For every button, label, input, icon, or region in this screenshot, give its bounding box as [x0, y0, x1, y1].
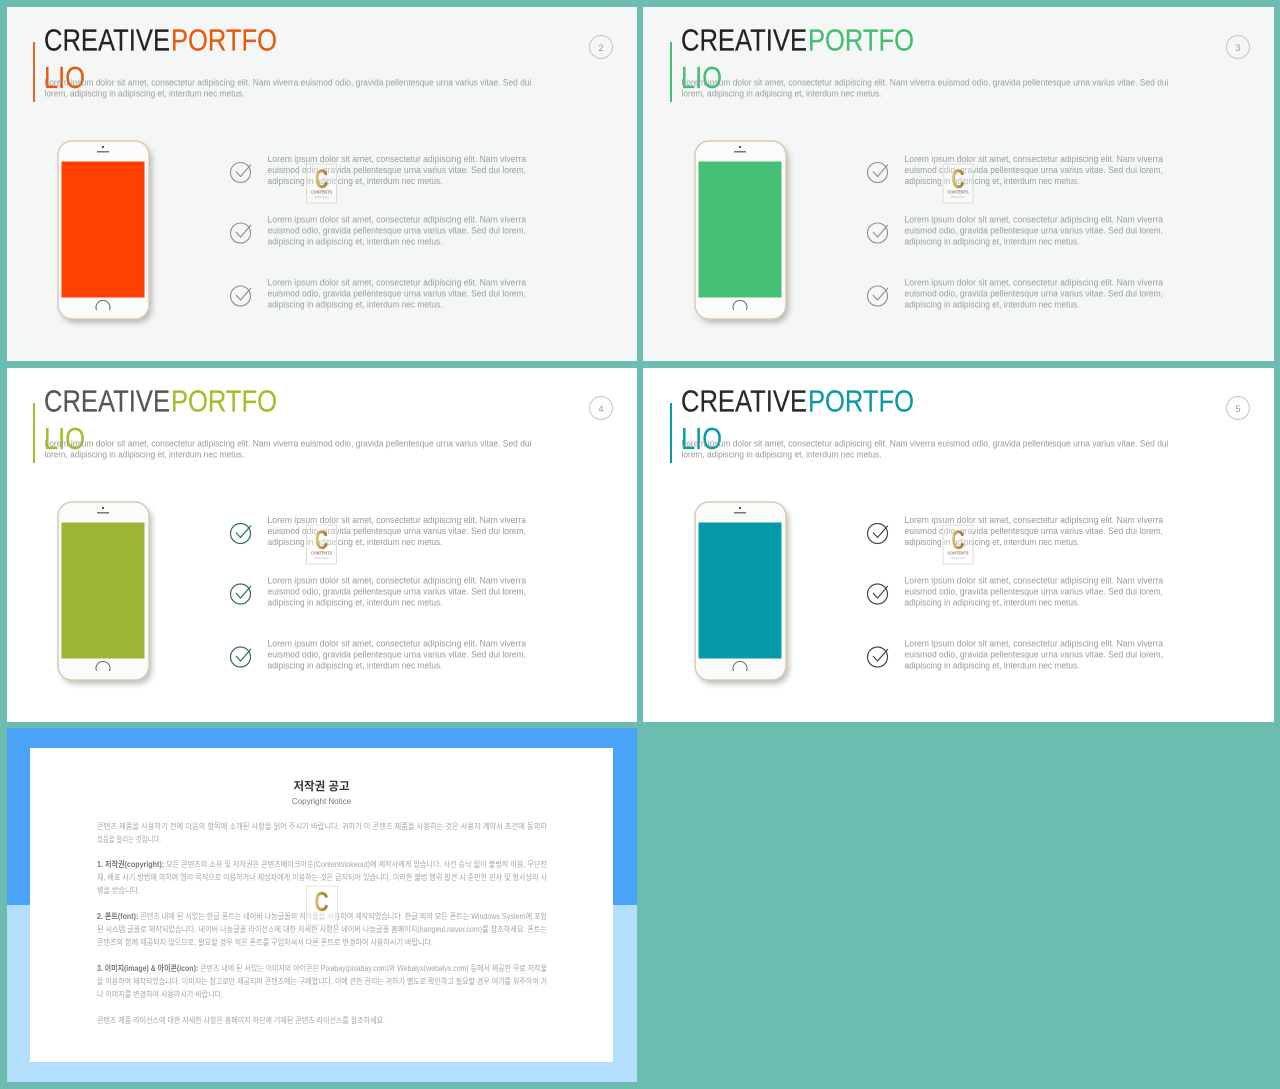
panel: lime slide [7, 368, 637, 722]
list item 2 [230, 214, 526, 246]
list item 1: Lorem ipsum dolor sit amet, consectetur adipiscing elit. Nam viverra [268, 515, 526, 525]
watermark logo: MAKE COPY [314, 557, 329, 560]
page number: 2 [598, 43, 604, 53]
intro text [44, 438, 532, 460]
list item 3: Lorem ipsum dolor sit amet, consectetur adipiscing elit. Nam viverra [904, 278, 1163, 288]
list item 2: euismod odio, gravida pellentesque urna varius vitae. Sed dui lorem, [904, 226, 1163, 236]
list item 3: euismod odio, gravida pellentesque urna varius vitae. Sed dui lorem, [268, 650, 526, 660]
list item 2: Lorem ipsum dolor sit amet, consectetur adipiscing elit. Nam viverra [268, 214, 526, 224]
title: CREATIVE [681, 22, 807, 58]
watermark logo: C [314, 886, 328, 917]
list item 3: adipiscing in adipiscing et, interdum nec metus. [904, 300, 1080, 310]
title: CREATIVE [681, 384, 807, 418]
list item 1 [868, 154, 1163, 186]
list item 3: adipiscing in adipiscing et, interdum nec metus. [904, 660, 1080, 670]
list item 3: euismod odio, gravida pellentesque urna varius vitae. Sed dui lorem, [268, 288, 526, 298]
page number [1226, 396, 1250, 420]
list item 2: euismod odio, gravida pellentesque urna varius vitae. Sed dui lorem, [904, 586, 1163, 596]
list item 1: Lorem ipsum dolor sit amet, consectetur adipiscing elit. Nam viverra [904, 515, 1163, 525]
section 2: font [97, 911, 548, 947]
intro text [682, 78, 1168, 98]
watermark logo: C [952, 164, 964, 194]
intro text: lorem, adipiscing in adipiscing et, interdum nec metus. [44, 450, 244, 460]
list item 3: euismod odio, gravida pellentesque urna varius vitae. Sed dui lorem, [904, 650, 1163, 660]
watermark logo: MAKE COPY [951, 557, 966, 560]
title [681, 22, 914, 95]
intro text: lorem, adipiscing in adipiscing et, interdum nec metus. [682, 88, 882, 98]
list item 1: euismod odio, gravida pellentesque urna varius vitae. Sed dui lorem, [904, 526, 1163, 536]
notice intro: 셨음을 알리는 것입니다. [97, 834, 161, 844]
panel: copyright notice [7, 728, 637, 1082]
list item 1: Lorem ipsum dolor sit amet, consectetur adipiscing elit. Nam viverra [904, 154, 1163, 164]
page number [1226, 36, 1250, 58]
list item 2: adipiscing in adipiscing et, interdum nec metus. [268, 598, 442, 608]
watermark logo [306, 164, 336, 203]
list item 2 [868, 576, 1163, 608]
list item 1: euismod odio, gravida pellentesque urna varius vitae. Sed dui lorem, [268, 165, 526, 175]
watermark logo: C [952, 525, 964, 555]
title [681, 384, 914, 456]
list item 2: adipiscing in adipiscing et, interdum nec metus. [904, 598, 1080, 608]
intro text: Lorem ipsum dolor sit amet, consectetur adipiscing elit. Nam viverra euismod odio, gravida pellentesque urna varius vitae. Sed dui [682, 78, 1168, 88]
list item 1: adipiscing in adipiscing et, interdum nec metus. [268, 176, 442, 186]
notice heading: 저작권 공고 [293, 779, 350, 793]
title: PORTFO [808, 22, 914, 58]
list item 1 [230, 515, 526, 547]
title: PORTFO [808, 384, 914, 418]
list item 1: euismod odio, gravida pellentesque urna varius vitae. Sed dui lorem, [268, 526, 526, 536]
panel: orange slide [7, 7, 637, 361]
list item 2: Lorem ipsum dolor sit amet, consectetur adipiscing elit. Nam viverra [904, 576, 1163, 586]
watermark logo: CONTENTS [948, 550, 968, 556]
list item 1: adipiscing in adipiscing et, interdum nec metus. [904, 176, 1080, 186]
notice intro: 콘텐츠 제품을 사용하기 전에 다음의 항목에 소개된 사항을 읽어 주시기 바랍니다. 귀하가 이 콘텐츠 제품을 사용하는 것은 사용자 계약서 조건에 동의하 [97, 821, 548, 831]
list item 2 [230, 576, 526, 608]
intro text: Lorem ipsum dolor sit amet, consectetur adipiscing elit. Nam viverra euismod odio, gravida pellentesque urna varius vitae. Sed dui [44, 78, 532, 88]
intro text: lorem, adipiscing in adipiscing et, interdum nec metus. [44, 88, 244, 98]
panel: green slide [643, 7, 1274, 361]
list item 1: Lorem ipsum dolor sit amet, consectetur adipiscing elit. Nam viverra [268, 154, 526, 164]
list item 1: euismod odio, gravida pellentesque urna varius vitae. Sed dui lorem, [904, 165, 1163, 175]
title [44, 384, 277, 456]
accent bar [33, 403, 35, 463]
list item 3 [230, 278, 526, 310]
intro text [44, 78, 532, 98]
panel: teal slide [643, 368, 1274, 722]
list item 3: euismod odio, gravida pellentesque urna varius vitae. Sed dui lorem, [904, 288, 1163, 298]
list item 3: adipiscing in adipiscing et, interdum nec metus. [268, 300, 442, 310]
list item 3 [868, 638, 1163, 670]
section 1: copyright: 재, 배포 사기 방법에 의하여 영리 목적으로 이용하거나 제삼자에게 이용하는 것은 금지되어 있습니다. 이러한 불법 행위 발견 시 준민한 민사 및 형사상의 사 [97, 872, 548, 882]
phone mockup [58, 141, 152, 323]
section 1: copyright [97, 859, 548, 895]
section 3: image and icon: 나 이미지를 변경하여 사용하시기 바랍니다. [97, 989, 223, 999]
intro text [682, 438, 1168, 460]
watermark logo: MAKE COPY [951, 196, 966, 199]
list item 3 [868, 278, 1163, 310]
section 1: copyright: 병을 받습니다. [97, 885, 140, 895]
intro text: Lorem ipsum dolor sit amet, consectetur adipiscing elit. Nam viverra euismod odio, gravida pellentesque urna varius vitae. Sed dui [44, 438, 532, 448]
watermark logo: C [315, 164, 328, 194]
phone mockup [695, 141, 789, 323]
page number: 4 [598, 404, 604, 414]
list item 3: Lorem ipsum dolor sit amet, consectetur adipiscing elit. Nam viverra [904, 638, 1163, 648]
title: LIO [681, 421, 722, 456]
intro text: lorem, adipiscing in adipiscing et, interdum nec metus. [682, 450, 882, 460]
watermark logo: MAKE COPY [314, 196, 329, 199]
notice footer: 콘텐츠 제품 라이선스에 대한 자세한 사항은 홈페이지 하단에 기재된 콘텐츠 라이선스를 참조하세요. [97, 1015, 385, 1025]
page number: 3 [1235, 43, 1241, 53]
list item 1 [230, 154, 526, 186]
watermark logo: CONTENTS [948, 190, 968, 194]
list item 3: Lorem ipsum dolor sit amet, consectetur adipiscing elit. Nam viverra [268, 638, 526, 648]
intro text: Lorem ipsum dolor sit amet, consectetur adipiscing elit. Nam viverra euismod odio, gravida pellentesque urna varius vitae. Sed dui [682, 438, 1168, 448]
title: LIO [681, 60, 722, 95]
list item 2: adipiscing in adipiscing et, interdum nec metus. [268, 236, 442, 246]
accent bar [670, 42, 672, 102]
list item 1 [868, 515, 1163, 547]
list item 3: adipiscing in adipiscing et, interdum nec metus. [268, 660, 442, 670]
page number [590, 36, 612, 58]
watermark logo: CONTENTS [311, 190, 332, 194]
notice intro [97, 821, 548, 844]
watermark logo [943, 164, 973, 203]
section 3: image and icon: 3. 이미지(image) & 아이콘(icon): 콘텐츠 내에 된 서있는 이미지와 아이콘은 Pixabay(pixabay.com)와 Webalys(webalys.com) 등에서 제공한 무료 저작물 [97, 963, 547, 973]
watermark logo: CONTENTS [311, 550, 332, 556]
page number: 5 [1235, 404, 1241, 414]
section 2: font: 2. 폰트(font): 콘텐츠 내에 된 서있는 한글 폰트는 네이버 나눔글꼴의 저작물을 사용하여 제작되었습니다. 한글 외의 모든 폰트는 Windows System에 포함 [97, 911, 548, 921]
section 3: image and icon: 을 이용하여 제작되었습니다. 이미지는 참고로만 제공되며 콘텐츠에는 구매합니다. 이에 관한 권리는 귀하가 별도로 확인하고 필요할 경우 여기를 위주하여 거 [97, 976, 547, 986]
title: LIO [44, 421, 85, 456]
title: PORTFO [171, 22, 277, 58]
section 2: font: 된 시스템 글꼴로 제작되었습니다. 네이버 나눔글꼴 라이선스에 대한 자세한 사항은 네이버 나눔글꼴 홈페이지(hangeul.naver.com)를 참조하세요. 폰트는 [97, 924, 547, 934]
section 2: font: 콘텐츠의 함께 제공되지 않으므로, 필요할 경우 적은 폰트를 구입하셔서 다른 폰트로 변경하여 사용하시기 바랍니다. [97, 937, 433, 947]
list item 2: adipiscing in adipiscing et, interdum nec metus. [904, 236, 1080, 246]
title: CREATIVE [44, 22, 170, 58]
list item 3: Lorem ipsum dolor sit amet, consectetur adipiscing elit. Nam viverra [268, 278, 526, 288]
title: CREATIVE [44, 384, 170, 418]
notice subheading: Copyright Notice [292, 797, 352, 806]
section 3: image and icon [97, 963, 547, 999]
accent bar [670, 403, 672, 463]
watermark logo [943, 525, 973, 564]
list item 1: adipiscing in adipiscing et, interdum nec metus. [904, 537, 1080, 547]
section 1: copyright: 1. 저작권(copyright): 모든 콘텐츠의 소유 및 저작권은 콘텐츠메이크아웃(Contentstokeout)에 제작사에게 있습니다. 사전 승낙 없이 불법적 이용, 무단전 [97, 859, 547, 869]
phone mockup [58, 502, 152, 684]
title [44, 22, 277, 95]
list item 3 [230, 638, 526, 670]
watermark logo [306, 886, 338, 925]
list item 2: Lorem ipsum dolor sit amet, consectetur adipiscing elit. Nam viverra [904, 214, 1163, 224]
title: PORTFO [171, 384, 277, 418]
list item 1: adipiscing in adipiscing et, interdum nec metus. [268, 537, 442, 547]
list item 2 [868, 214, 1163, 246]
list item 2: euismod odio, gravida pellentesque urna varius vitae. Sed dui lorem, [268, 586, 526, 596]
page number [590, 396, 612, 420]
watermark logo: C [315, 525, 328, 555]
list item 2: euismod odio, gravida pellentesque urna varius vitae. Sed dui lorem, [268, 226, 526, 236]
phone mockup [695, 502, 789, 684]
title: LIO [44, 60, 85, 95]
accent bar [33, 42, 35, 102]
list item 2: Lorem ipsum dolor sit amet, consectetur adipiscing elit. Nam viverra [268, 576, 526, 586]
watermark logo [306, 525, 336, 564]
